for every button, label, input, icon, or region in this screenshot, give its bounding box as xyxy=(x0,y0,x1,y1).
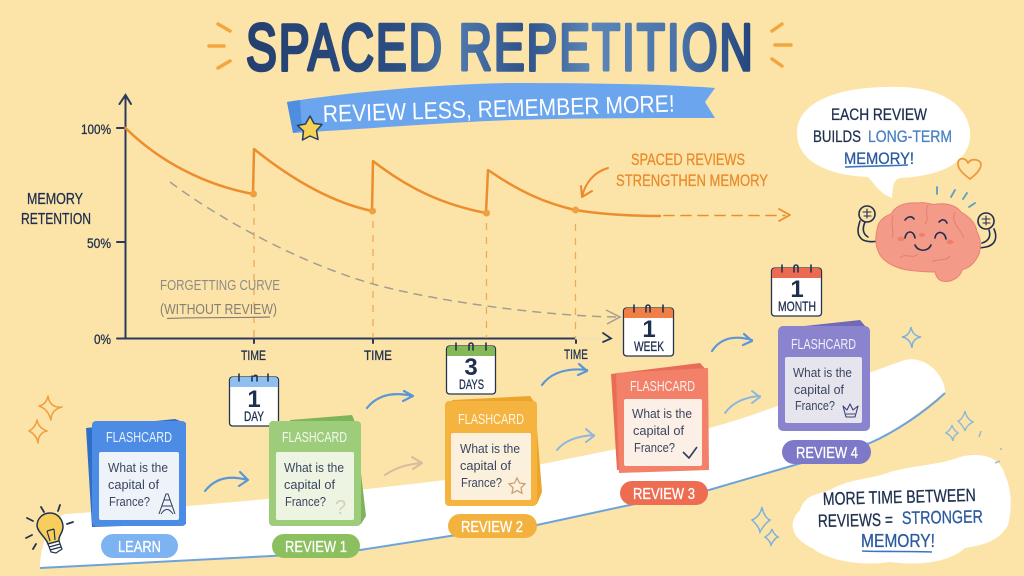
calendar: 1 week xyxy=(624,305,674,356)
speech bubble: BUILDS xyxy=(813,127,861,146)
annotation: spaced reviews: SPACED REVIEWS xyxy=(631,150,745,169)
axis labels: 50% xyxy=(87,235,111,251)
flashcard: learn xyxy=(86,419,186,527)
brain sparkle ticks xyxy=(937,187,975,207)
flashcard: learn: capital of xyxy=(108,478,160,492)
icon: blue sparkles right xyxy=(946,411,1002,463)
chart axes xyxy=(117,95,611,343)
axis labels: TIME xyxy=(564,346,588,362)
axis labels: TIME xyxy=(241,347,266,363)
axis labels: 100% xyxy=(81,121,111,137)
memory retention chart xyxy=(21,95,790,363)
flashcard: review 4: FLASHCARD xyxy=(791,336,856,353)
calendar: 1 month: 1 xyxy=(790,276,804,303)
flashcard: review 4: capital of xyxy=(794,383,845,397)
cloud callout: REVIEWS = xyxy=(818,510,893,531)
ribbon banner: REVIEW LESS, REMEMBER MORE! xyxy=(322,91,675,128)
flashcard: review 2: capital of xyxy=(460,459,512,473)
icon: smiling brain xyxy=(858,187,996,281)
calendar: 3 days xyxy=(446,343,496,394)
calendar: 1 day: DAY xyxy=(244,408,264,424)
flashcard: review 1: What is the xyxy=(284,461,344,475)
icon: heart xyxy=(958,159,981,179)
speech bubble: LONG-TERM xyxy=(868,127,952,146)
axis labels: RETENTION xyxy=(21,211,91,228)
step: review 4 xyxy=(778,320,871,464)
forgetting curve label xyxy=(160,277,280,318)
flashcard: review 4 xyxy=(778,320,870,431)
flashcard: review 1: FLASHCARD xyxy=(282,429,347,446)
pill: review 4 xyxy=(782,440,871,464)
axis labels: TIME xyxy=(364,347,392,363)
arrow: over review 2 xyxy=(542,364,587,385)
axis labels xyxy=(21,121,588,363)
spaced review retention curve xyxy=(126,128,790,221)
dashed review guides xyxy=(254,204,576,338)
flashcard: review 2: What is the xyxy=(460,442,520,456)
flashcard: review 2 xyxy=(445,396,542,506)
step: review 1 xyxy=(269,415,366,558)
flashcard: review 3: France? xyxy=(634,441,675,455)
icon: blue sparkle upper xyxy=(902,327,921,348)
pill: review 1: REVIEW 1 xyxy=(285,539,347,556)
annotation: spaced reviews xyxy=(581,150,768,197)
pill: review 1 xyxy=(272,534,360,558)
calendar: 3 days: 3 xyxy=(464,354,478,381)
arrow: over review 3 xyxy=(712,334,752,351)
speech bubble: MEMORY! xyxy=(844,149,914,168)
step: review 2 xyxy=(445,396,542,538)
flashcard: learn: France? xyxy=(109,495,150,509)
pill: review 2 xyxy=(448,514,537,538)
speech bubble: EACH REVIEW xyxy=(831,105,927,124)
forgetting curve label: (WITHOUT REVIEW) xyxy=(160,301,277,318)
road of increasing intervals xyxy=(40,359,945,568)
arrow: over review 1 xyxy=(367,391,413,408)
flashcard: review 2: FLASHCARD xyxy=(458,411,524,428)
pill: review 2: REVIEW 2 xyxy=(461,519,523,536)
flashcard: review 1: capital of xyxy=(284,478,336,492)
flashcard: review 4: What is the xyxy=(793,366,852,380)
title: SPACED REPETITION xyxy=(246,11,753,85)
cloud callout xyxy=(793,455,1011,563)
flashcard: review 1: France? xyxy=(285,495,326,509)
brain arms xyxy=(858,206,996,248)
annotation: spaced reviews: STRENGTHEN MEMORY xyxy=(616,171,768,190)
pill: review 3: REVIEW 3 xyxy=(633,486,695,503)
calendar: 1 day xyxy=(230,374,278,426)
cloud callout: STRONGER xyxy=(902,507,983,528)
calendar: 1 day: 1 xyxy=(247,386,261,413)
flashcard: review 3: capital of xyxy=(633,424,685,438)
icon: light bulb xyxy=(26,505,73,553)
flashcard: review 1 xyxy=(269,415,366,526)
flashcard: learn: FLASHCARD xyxy=(106,429,172,446)
flashcard: review 2: France? xyxy=(461,476,502,490)
speech bubble xyxy=(797,87,970,198)
forgetting curve label: FORGETTING CURVE xyxy=(160,277,280,294)
calendar: 1 month xyxy=(772,265,822,316)
arrow: faded to review 4 xyxy=(725,391,760,413)
review points xyxy=(250,190,579,216)
icon: blue sparkles lower xyxy=(752,507,778,545)
forgetting curve xyxy=(170,182,620,324)
flashcard: review 4: France? xyxy=(795,399,835,413)
cloud callout: MORE TIME BETWEEN xyxy=(823,485,976,509)
calendar: 1 week: 1 xyxy=(642,316,656,343)
flashcard: review 1: ? xyxy=(335,497,346,519)
flashcard: learn: What is the xyxy=(108,461,168,475)
brain body xyxy=(876,203,980,281)
ribbon banner xyxy=(287,83,715,140)
arrow: faded to review 3 xyxy=(557,429,594,450)
step: learn xyxy=(86,419,186,558)
flashcard: review 3 xyxy=(611,363,709,473)
arrow: faded to review 2 xyxy=(385,457,422,475)
icon: orange sparkles xyxy=(29,396,62,443)
brain face xyxy=(898,217,954,250)
pill: learn: LEARN xyxy=(118,539,161,556)
axis labels: 0% xyxy=(94,331,111,347)
axis labels: MEMORY xyxy=(27,191,83,208)
flashcard: review 3: What is the xyxy=(632,407,692,421)
flashcard: review 3: FLASHCARD xyxy=(630,378,695,395)
cloud callout: MEMORY! xyxy=(861,531,935,551)
pill: review 4: REVIEW 4 xyxy=(796,445,858,462)
calendar: 1 month: MONTH xyxy=(778,298,816,314)
step: review 3 xyxy=(611,363,709,505)
calendar: 1 week: WEEK xyxy=(634,338,664,354)
pill: review 3 xyxy=(620,481,708,505)
calendar: 3 days: DAYS xyxy=(459,376,484,392)
arrow: learn to review 1 xyxy=(205,472,248,491)
